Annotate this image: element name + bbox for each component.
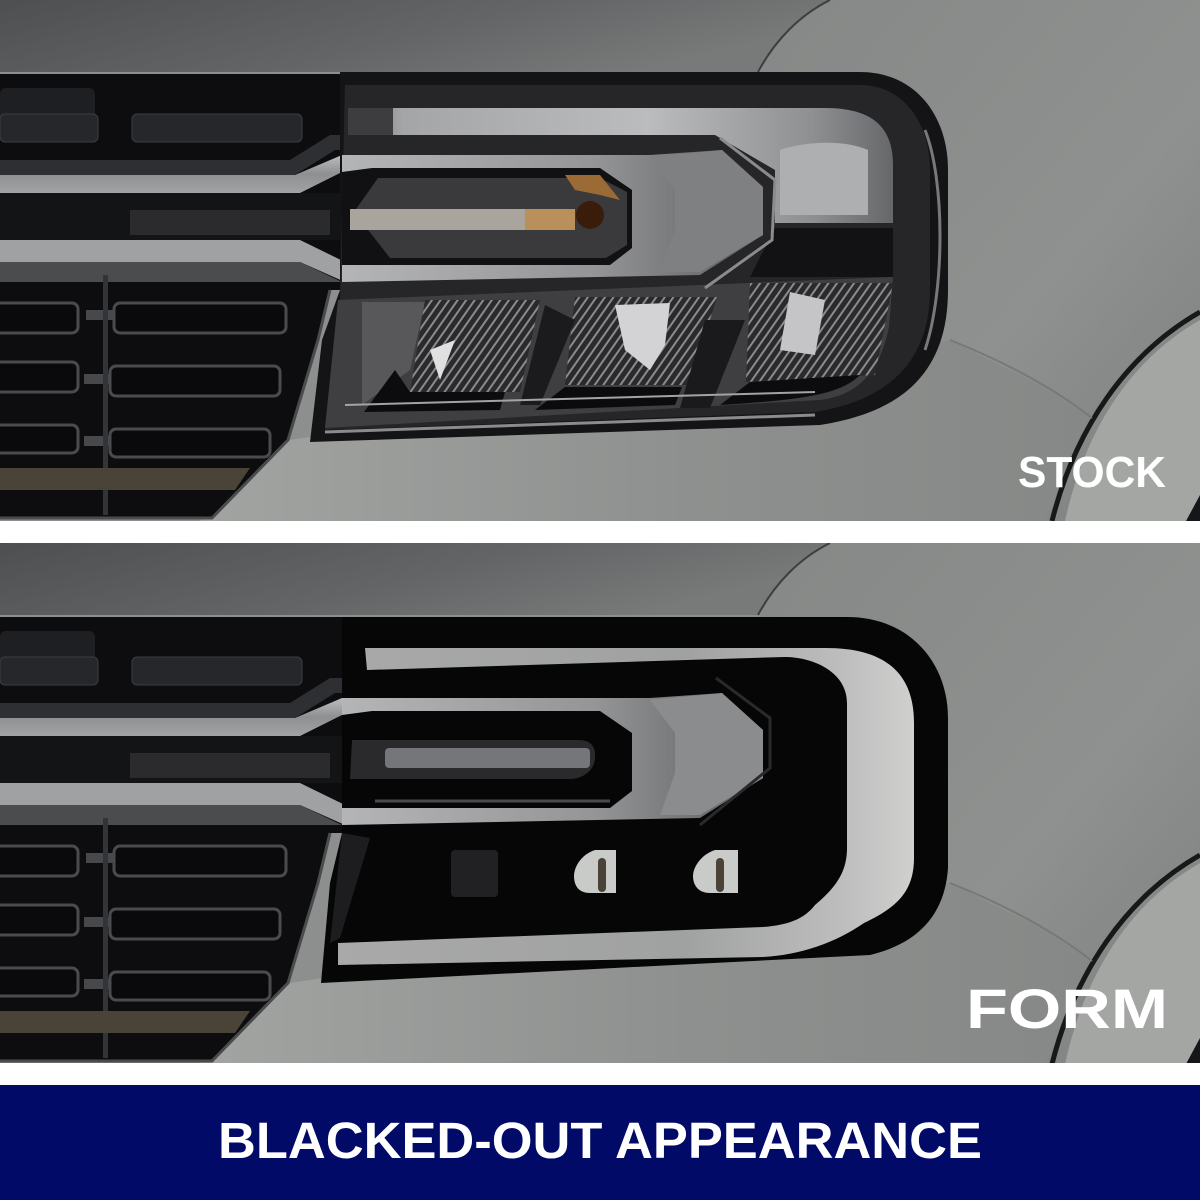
banner heading: BLACKED-OUT APPEARANCE <box>218 1112 982 1169</box>
label: FORM logo: FORM <box>966 977 1168 1040</box>
projector lens 1, dim <box>451 850 498 897</box>
white separator strips <box>0 521 1200 1085</box>
label: STOCK: STOCK <box>1018 448 1166 497</box>
sequential light U band <box>338 648 914 965</box>
lens strip below band <box>750 228 893 277</box>
panel: form headlight photo <box>0 543 1200 1064</box>
low beam chamber <box>325 277 893 428</box>
silver housing surround <box>342 150 763 282</box>
panel: stock headlight photo <box>0 0 1200 521</box>
reflector 3 <box>746 283 893 382</box>
reflector 2 <box>565 297 717 385</box>
car body and grille <box>0 0 1200 521</box>
car body and grille <box>0 543 1200 1064</box>
banner <box>0 1085 1200 1200</box>
black reflector bases <box>364 370 505 412</box>
projector lens 2 <box>574 850 616 893</box>
headlight: stock housing <box>310 72 948 442</box>
daytime running light band, silver <box>348 108 893 223</box>
lower inner black panel edge <box>330 833 370 943</box>
reflector 1 <box>410 300 540 392</box>
LED signal window <box>342 711 632 808</box>
projector lens 3 <box>693 850 738 893</box>
headlight: blacked-out housing <box>321 617 948 983</box>
turn signal window <box>342 168 632 265</box>
silver housing surround <box>342 693 763 825</box>
